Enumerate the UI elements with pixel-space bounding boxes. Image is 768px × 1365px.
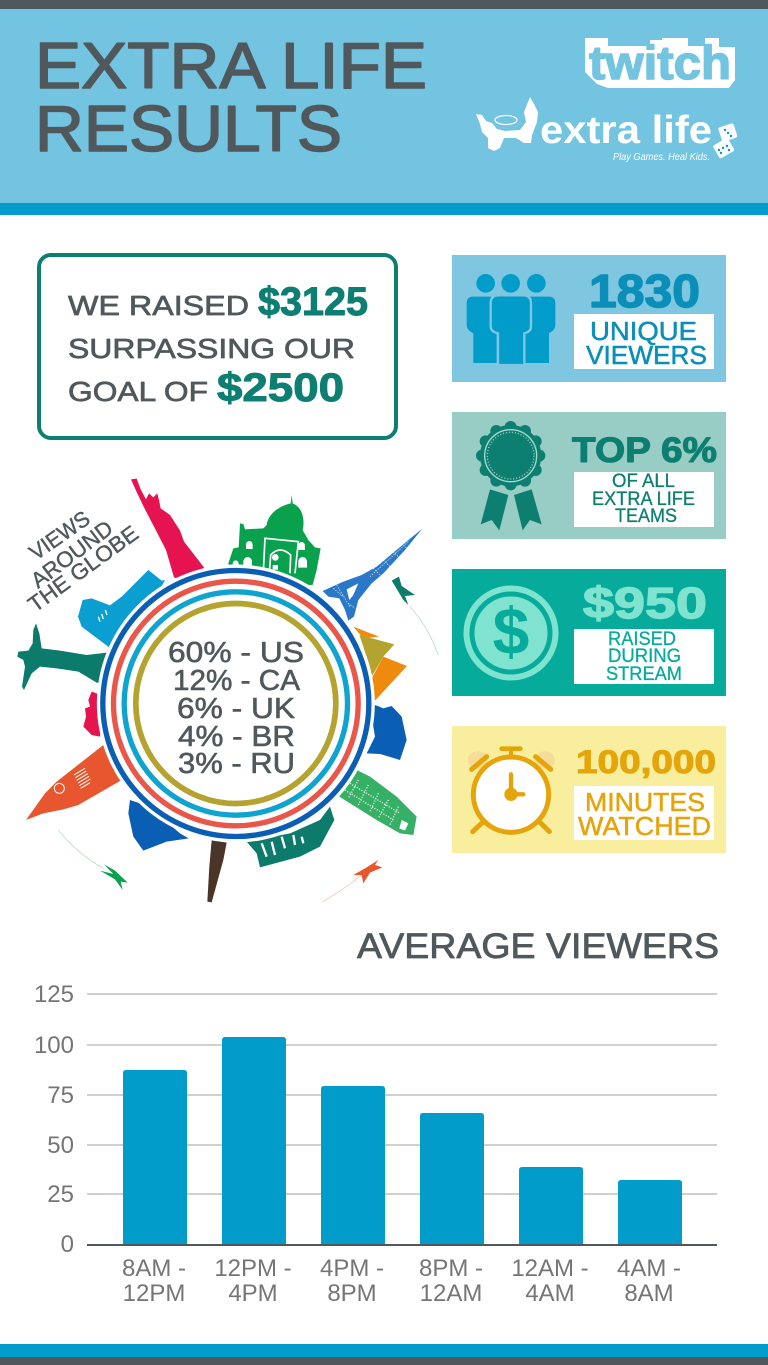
- y axis labels: 25: [47, 1181, 74, 1208]
- teal monument bottom: [247, 807, 334, 867]
- chart heading: AVERAGE VIEWERS: [357, 927, 719, 966]
- footer band: [0, 1344, 768, 1365]
- label box: MINUTES: [585, 787, 705, 817]
- label box: [574, 786, 714, 841]
- logo: extra life: [476, 97, 738, 163]
- title: RESULTS: [35, 92, 342, 165]
- label box: [574, 629, 714, 685]
- label box: VIEWERS: [586, 340, 707, 370]
- stat: 1830: 1830: [589, 265, 700, 317]
- big ben: [26, 745, 121, 820]
- green plane: [58, 830, 128, 890]
- icon: dollar coin: [464, 586, 558, 680]
- panel: raised during stream: [452, 569, 726, 696]
- logo: extra life: extra life: [540, 109, 712, 152]
- globe stat list: [168, 637, 304, 780]
- stat: top 6%: TOP 6%: [572, 431, 717, 470]
- icon: dollar coin: $: [493, 594, 529, 668]
- x axis labels: 12PM -: [214, 1255, 292, 1282]
- panel: minutes watched: [452, 726, 726, 853]
- header band: [0, 0, 768, 215]
- x axis labels: 12PM: [123, 1280, 185, 1307]
- icon: award rosette: [476, 421, 545, 530]
- globe stat list: 4% - BR: [178, 721, 295, 753]
- globe heading: AROUND: [26, 515, 118, 593]
- bar chart: average viewers: [34, 981, 717, 1307]
- red plane: [323, 860, 382, 902]
- leaning tower of pisa: [339, 767, 417, 835]
- callout: money raised: [39, 255, 396, 438]
- panel: top 6 percent: [452, 412, 726, 539]
- y axis labels: 50: [47, 1132, 74, 1159]
- label box: OF ALL: [612, 471, 675, 492]
- title: EXTRA LIFE: [35, 29, 427, 102]
- x axis labels: 4AM: [525, 1280, 575, 1307]
- red temple: [83, 692, 103, 737]
- teal plane: [392, 577, 438, 655]
- label box: RAISED: [608, 629, 676, 650]
- white disc behind rings: [97, 564, 375, 842]
- callout: money raised: $3125: [258, 280, 368, 324]
- colosseum: [78, 570, 165, 648]
- bars: [123, 1037, 682, 1244]
- eiffel tower: [323, 529, 422, 621]
- x axis labels: 8AM -: [122, 1255, 186, 1282]
- label box: TEAMS: [615, 506, 677, 527]
- y axis labels: 0: [61, 1231, 74, 1258]
- globe stat list: 6% - UK: [177, 693, 296, 725]
- y axis labels: 125: [34, 981, 74, 1008]
- x axis labels: [122, 1255, 681, 1307]
- label box: UNIQUE: [590, 316, 697, 346]
- globe heading: THE GLOBE: [23, 520, 143, 617]
- label box: EXTRA LIFE: [592, 489, 695, 510]
- globe stat list: 12% - CA: [173, 665, 301, 697]
- label box: STREAM: [606, 664, 682, 685]
- x axis labels: 4PM: [228, 1280, 278, 1307]
- stat: 100,000: 100,000: [576, 744, 716, 780]
- callout: money raised: SURPASSING OUR: [68, 333, 355, 364]
- statue of liberty: [131, 479, 204, 583]
- x axis labels: 12AM: [420, 1280, 482, 1307]
- stat: $950: $950: [583, 579, 707, 628]
- x axis labels: 4AM -: [617, 1255, 681, 1282]
- icon: people: [467, 274, 555, 365]
- taj mahal: [228, 495, 321, 585]
- y axis labels: [34, 981, 74, 1258]
- callout: money raised: $2500: [217, 366, 344, 410]
- logo: twitch: twitch: [589, 36, 731, 89]
- brown spire: [207, 840, 227, 902]
- panel: unique viewers: [452, 255, 726, 382]
- y axis labels: 75: [47, 1082, 74, 1109]
- label box: WATCHED: [578, 811, 711, 841]
- icon: alarm clock: [468, 749, 555, 832]
- blue palace right: [367, 705, 407, 760]
- x axis labels: 8AM: [624, 1280, 674, 1307]
- x axis labels: 4PM -: [320, 1255, 384, 1282]
- concentric rings: [103, 570, 369, 836]
- y axis labels: 100: [34, 1032, 74, 1059]
- panel: views around the globe: [17, 479, 438, 902]
- globe stat list: 3% - RU: [178, 748, 295, 780]
- label box: [574, 314, 714, 370]
- x axis labels: 8PM -: [419, 1255, 483, 1282]
- logo: extra life: Play Games. Heal Kids.: [613, 151, 710, 163]
- landmark silhouettes: [17, 479, 438, 902]
- x axis labels: 12AM -: [511, 1255, 589, 1282]
- x axis labels: 8PM: [327, 1280, 377, 1307]
- globe stat list: 60% - US: [168, 637, 304, 669]
- title: [35, 29, 427, 165]
- callout: money raised: WE RAISED: [68, 290, 249, 321]
- callout: money raised: GOAL OF: [68, 376, 208, 407]
- globe heading: VIEWS: [25, 506, 95, 565]
- label box: [574, 471, 714, 527]
- pyramids: [353, 627, 407, 701]
- label box: DURING: [608, 646, 681, 667]
- blue palace left: [128, 800, 189, 851]
- christ the redeemer: [17, 623, 107, 690]
